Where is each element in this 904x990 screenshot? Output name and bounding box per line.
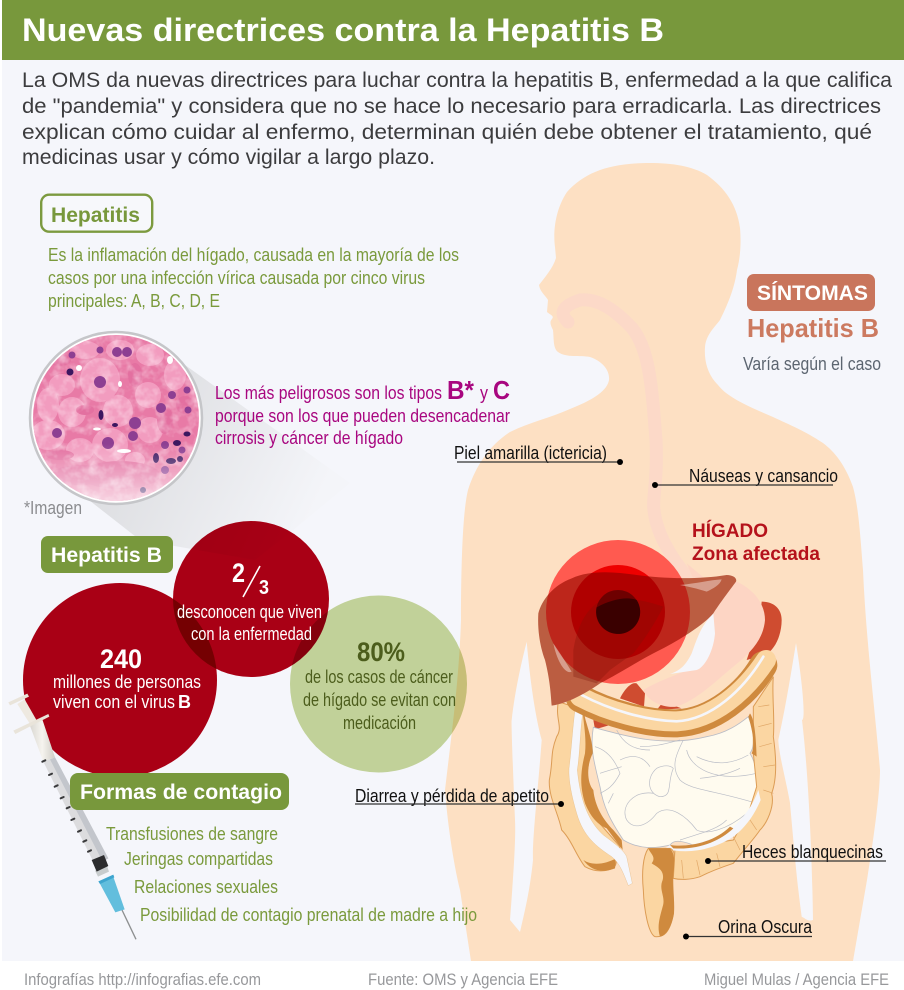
label: dark urine: Orina Oscura	[718, 916, 813, 937]
dangerous types note: Los más peligrosos son los tipos	[215, 382, 442, 403]
stat: 240 million: 240	[100, 644, 142, 674]
Hepatitis definition: Es la inflamación del hígado, causada en la mayoría de los	[48, 244, 459, 265]
title banner: Nuevas directrices contra la Hepatitis B	[22, 12, 664, 48]
image caption: *Imagen	[24, 498, 82, 518]
stat: 80 percent: 80%	[357, 637, 405, 667]
Hepatitis definition: principales: A, B, C, D, E	[48, 290, 220, 311]
Hepatitis B heading: Hepatitis B	[51, 543, 162, 567]
Hepatitis heading	[41, 195, 152, 232]
stat: 240 million: viven con el virus	[53, 692, 175, 712]
label: nausea	[652, 465, 838, 488]
statistic circles	[23, 521, 467, 777]
stat: 80 percent: de los casos de cáncer	[305, 667, 453, 687]
stat: 240 million: B	[178, 692, 191, 712]
label: pale stool	[705, 841, 886, 864]
organ: descending colon and rectum	[643, 677, 776, 937]
dangerous types note: cirrosis y cáncer de hígado	[215, 427, 403, 448]
organ: ascending colon	[549, 702, 632, 886]
Hepatitis B heading	[41, 536, 173, 573]
dangerous types note: B*	[447, 375, 475, 405]
stat: 240 million	[53, 644, 201, 712]
stat: two thirds: con la enfermedad	[191, 624, 312, 644]
footer credits: Infografías http://infografias.efe.com	[24, 970, 261, 989]
stat: 80 percent: de hígado se evitan con	[303, 690, 456, 710]
symptoms heading: Hepatitis B	[747, 313, 879, 343]
symptoms heading: Varía según el caso	[743, 354, 881, 374]
label: dark urine	[683, 916, 813, 940]
contagion list: Jeringas compartidas	[124, 848, 273, 869]
esophagus	[563, 300, 690, 580]
Hepatitis definition	[48, 244, 459, 311]
intro text: explican cómo cuidar al enfermo, determinan quién debe obtener el tratamiento, qué	[22, 121, 872, 144]
liver label: HÍGADO	[692, 520, 768, 542]
stat: 80 percent	[303, 637, 456, 733]
organ: stomach	[643, 540, 765, 707]
human body silhouette	[445, 163, 880, 961]
icon: syringe	[8, 694, 136, 939]
contagion list: Relaciones sexuales	[134, 876, 278, 897]
organ: liver core	[596, 590, 640, 634]
intro text: medicinas usar y cómo vigilar a largo plazo.	[22, 146, 435, 169]
liver label	[692, 520, 820, 565]
intro text: La OMS da nuevas directrices para luchar contra la hepatitis B, enfermedad a la que califica	[22, 69, 892, 92]
label: jaundice: Piel amarilla (ictericia)	[454, 442, 607, 463]
arm gaps	[510, 642, 813, 932]
intro text	[22, 69, 892, 169]
footer credits	[24, 970, 889, 989]
stat: two thirds: 2	[232, 558, 245, 588]
intro text: de "pandemia" y considera que no se hace lo necesario para erradicarla. Las directrices	[22, 95, 881, 118]
contagion list: Posibilidad de contagio prenatal de madre a hijo	[140, 904, 477, 925]
footer credits: Fuente: OMS y Agencia EFE	[368, 970, 558, 989]
dangerous types note: C	[493, 375, 510, 405]
stat: two thirds	[177, 558, 322, 644]
stat: two thirds: desconocen que viven	[177, 602, 322, 622]
stat: 240 million: millones de personas	[53, 672, 201, 692]
contagion list	[106, 823, 477, 925]
Formas de contagio heading	[70, 773, 289, 810]
organ: spleen	[747, 602, 782, 660]
stat: two thirds: 3	[259, 577, 269, 599]
Hepatitis definition: casos por una infección vírica causada por cinco virus	[48, 267, 425, 288]
label: diarrhoea: Diarrea y pérdida de apetito	[355, 785, 549, 806]
dangerous types note	[215, 375, 510, 448]
organ: transverse colon	[580, 657, 766, 723]
contagion list: Transfusiones de sangre	[106, 823, 278, 844]
digestive organs	[538, 540, 782, 937]
organ: affected zone circles	[546, 540, 690, 684]
label: nausea: Náuseas y cansancio	[689, 465, 838, 486]
shadow cone of the microscope image	[85, 365, 350, 560]
Hepatitis heading: Hepatitis	[51, 203, 140, 227]
liver label: Zona afectada	[692, 544, 820, 565]
label: pale stool: Heces blanquecinas	[742, 841, 883, 862]
symptoms heading: SÍNTOMAS	[757, 282, 868, 305]
dangerous types note: y	[480, 382, 489, 403]
organ: small intestine	[592, 717, 758, 848]
stat: 80 percent: medicación	[343, 713, 416, 733]
organ: liver base mask	[538, 572, 736, 706]
microscope image of liver tissue	[30, 332, 202, 504]
title banner	[2, 0, 904, 60]
symptoms heading	[743, 274, 881, 374]
Formas de contagio heading: Formas de contagio	[80, 780, 282, 804]
organ: liver	[538, 572, 736, 706]
dangerous types note: porque son los que pueden desencadenar	[215, 405, 510, 426]
